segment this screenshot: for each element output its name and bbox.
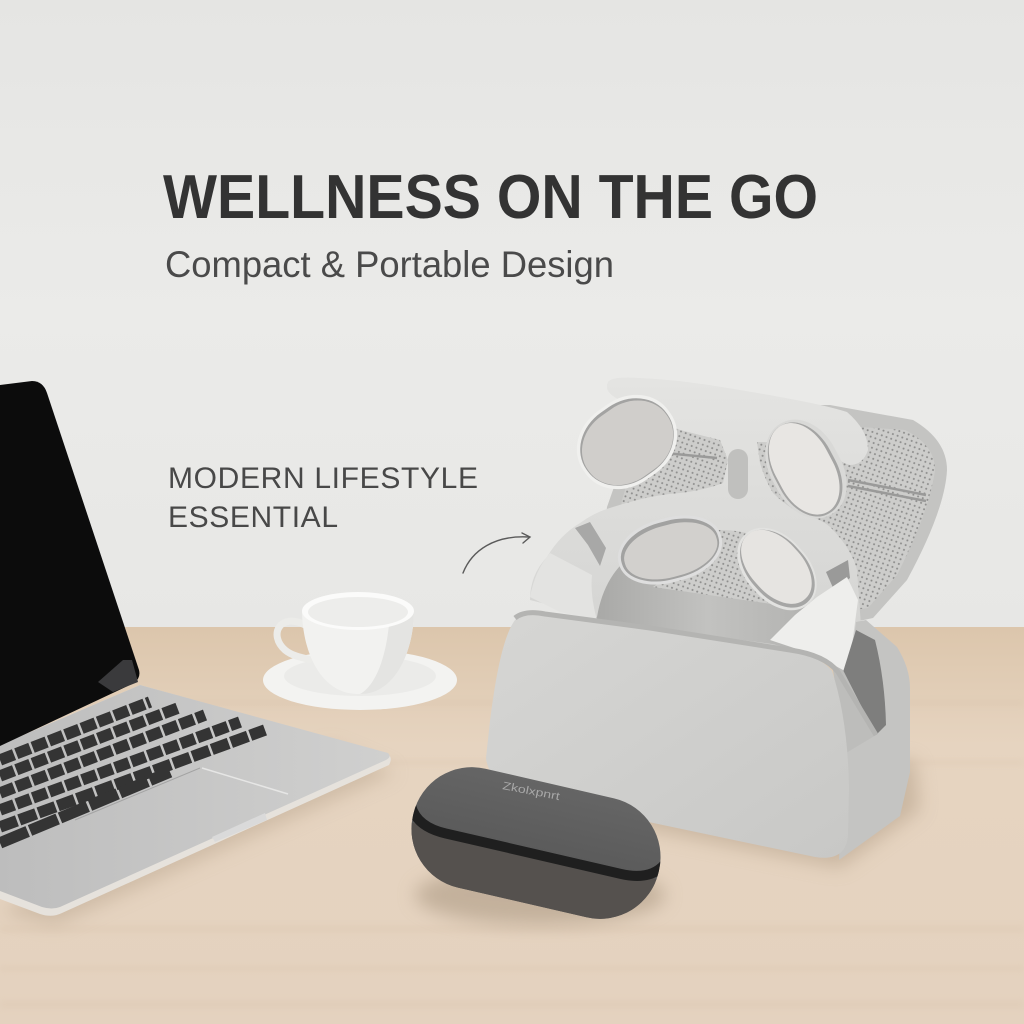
case logo: Zkolxpnrt: [501, 780, 561, 803]
band slot: [728, 449, 748, 499]
bag shadow: [500, 760, 920, 868]
cup: [302, 610, 414, 694]
case seam: [407, 806, 664, 883]
laptop: [0, 381, 395, 925]
coffee cup and saucer: [263, 592, 457, 710]
bag zipper: [515, 613, 876, 735]
bag interior: [585, 540, 830, 655]
massager band: [530, 378, 868, 672]
cup handle: [277, 621, 312, 660]
massager pad: lower right: [723, 513, 831, 625]
laptop base: [0, 685, 390, 908]
saucer: [263, 650, 457, 710]
dark capsule case: [411, 767, 668, 931]
background: wall: [0, 0, 1024, 628]
laptop rim: [0, 685, 391, 916]
laptop keyboard: [0, 702, 265, 843]
callout text: MODERN LIFESTYLE: [168, 462, 478, 495]
bag side opening: [843, 630, 886, 735]
bag open lid: [600, 405, 947, 625]
subtitle: Compact & Portable Design: [165, 244, 614, 285]
arrow: [463, 533, 530, 573]
massager right end cap: [770, 577, 858, 674]
bag side: [839, 620, 910, 860]
massager connector left: [575, 522, 606, 566]
massager pad: upper left: [560, 378, 694, 506]
travel bag with neck massager: [486, 378, 947, 868]
lid zipper tracks: [665, 453, 926, 501]
callout text: ESSENTIAL: [168, 501, 338, 534]
title: WELLNESS ON THE GO: [163, 163, 818, 232]
interior mesh floor: [653, 530, 793, 607]
laptop screen: [0, 381, 139, 746]
massager connector right: [826, 560, 850, 590]
massager pad: lower left: [611, 505, 729, 595]
laptop shadow: [0, 745, 395, 925]
bag gusset: [832, 664, 876, 753]
callout text: [168, 462, 478, 534]
bag body: [486, 613, 849, 858]
laptop trackpad: [75, 768, 288, 842]
massager left arm: [530, 553, 597, 620]
case body: [411, 767, 660, 919]
massager pad: upper right: [751, 407, 861, 531]
case shadow: [415, 865, 665, 925]
background: wooden desk: [0, 627, 1024, 1024]
